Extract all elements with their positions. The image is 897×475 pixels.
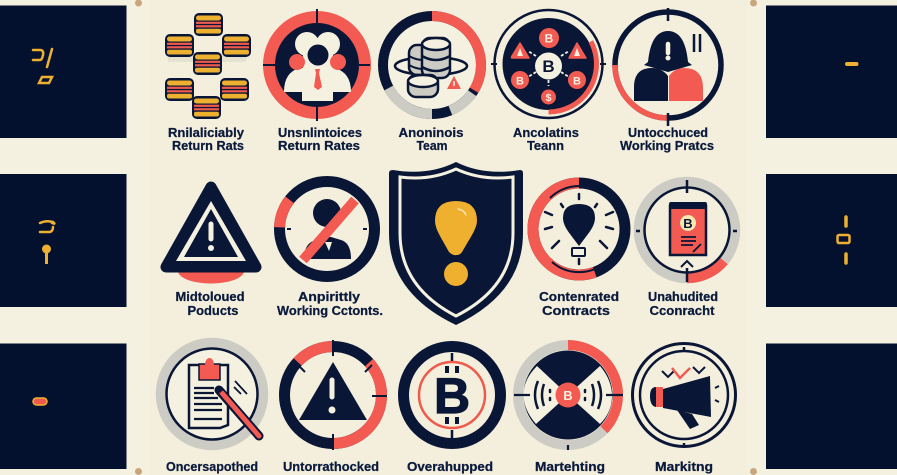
panel: left top [0, 6, 126, 138]
label: Oncersapothed: Oncersapothed [166, 460, 258, 474]
icon: untouched working person [615, 8, 721, 126]
label: Anoninois Team [398, 126, 464, 153]
label: Unsnlintoices Return Rates: Return Rates [278, 139, 360, 153]
icon: marketing signal [514, 345, 623, 450]
label: Unahudited Cconracht: Cconracht [650, 304, 715, 318]
label: Untocchuced Working Pratcs [620, 126, 714, 153]
panel: left bottom [0, 344, 126, 469]
label: Contenrated Contracts: Contracts [542, 304, 610, 318]
label: Ancolatins Teann: Ancolatins [513, 126, 579, 140]
label: Midtoloued Poducts [176, 290, 244, 318]
label: Overahupped: Overahupped [407, 460, 493, 474]
label: Anpirittly Working Cctonts.: Working Cctonts. [277, 304, 383, 318]
label: Unsnlintoices Return Rates [278, 126, 362, 153]
label: Midtoloued Poducts: Midtoloued [176, 290, 244, 304]
icon: concentrated contracts bulb [520, 170, 638, 288]
icon: bitcoin network: $ [546, 92, 552, 104]
label: Anoninois Team: Team [416, 139, 448, 153]
label: Rnilaliciably Return Rats: Return Rats [172, 139, 244, 153]
icon: central shield [389, 162, 523, 325]
label: Untocchuced Working Pratcs: Working Pratcs [620, 139, 714, 153]
icon: bitcoin network: B [545, 32, 554, 46]
label: Rnilaliciably Return Rats [168, 126, 244, 153]
label: Ancolatins Teann [513, 126, 579, 153]
label: Untorrathocked: Untorrathocked [283, 460, 379, 474]
label: Unsnlintoices Return Rates: Unsnlintoices [278, 126, 362, 140]
pin: top left [135, 0, 142, 6]
pin: bottom right [750, 468, 757, 475]
label: Rnilaliciably Return Rats: Rnilaliciably [168, 126, 244, 140]
icon: no person [278, 180, 376, 278]
icon: bitcoin network: B [542, 57, 555, 76]
label: Anpirittly Working Cctonts. [277, 290, 383, 318]
icon: bitcoin network [484, 0, 613, 129]
panel: right middle [766, 174, 897, 307]
icon: megaphone [632, 344, 736, 448]
label: Martehting: Martehting [535, 460, 605, 474]
icon: anonymous team coins [364, 0, 500, 133]
label: Markitng: Markitng [655, 460, 713, 474]
label: Midtoloued Poducts: Poducts [188, 304, 239, 318]
icon: marketing signal: B [563, 388, 573, 403]
label: Ancolatins Teann: Teann [527, 139, 564, 153]
icon: team target [263, 9, 370, 121]
label: Anoninois Team: Anoninois [398, 126, 464, 140]
pin: bottom left [135, 468, 142, 475]
panel: right top [766, 6, 897, 138]
label: Contenrated Contracts: Contenrated [539, 290, 619, 304]
panel: left middle [0, 174, 126, 307]
icon: unaudited contract: B [683, 216, 693, 231]
icon: warning triangle [166, 187, 256, 284]
icon: bitcoin coin [404, 346, 500, 444]
icon: clipboard and pencil [161, 343, 263, 445]
icon: coin stacks [165, 13, 251, 119]
label: Untocchuced Working Pratcs: Untocchuced [628, 126, 708, 140]
icon: unaudited contract [619, 162, 755, 298]
icon: bitcoin coin: B [434, 368, 470, 424]
label: Unahudited Cconracht: Unahudited [648, 290, 718, 304]
label: Anpirittly Working Cctonts.: Anpirittly [298, 290, 360, 304]
label: Unahudited Cconracht [648, 290, 718, 318]
icon: bitcoin network: B [516, 76, 524, 88]
icon: warning gauge [264, 326, 402, 464]
pin: top right [750, 0, 757, 6]
icon: bitcoin network: B [573, 76, 581, 88]
label: Contenrated Contracts [539, 290, 619, 318]
panel: right bottom [766, 344, 897, 469]
